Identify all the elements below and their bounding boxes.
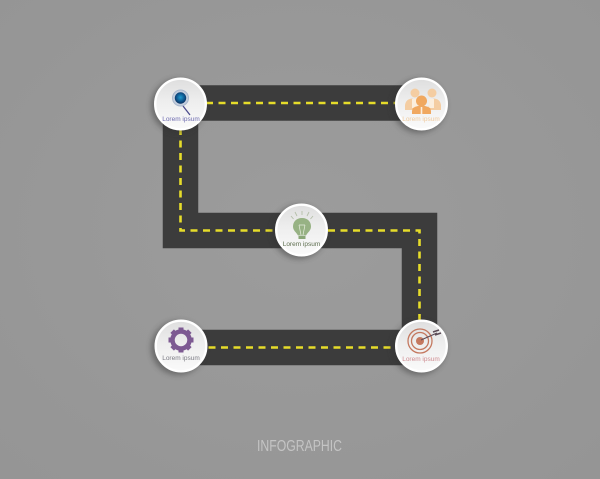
icon: target with arrow: [408, 329, 441, 353]
label: lorem ipsum: Lorem ipsum: [402, 356, 440, 363]
road: [180, 103, 421, 348]
title: INFOGRAPHIC: [257, 438, 342, 455]
node: target: [392, 321, 447, 375]
label: lorem ipsum: Lorem ipsum: [283, 241, 320, 248]
node: idea: [272, 205, 327, 259]
label: lorem ipsum: Lorem ipsum: [402, 116, 440, 123]
node: settings: [151, 321, 206, 375]
road centre dashes: [180, 103, 421, 348]
icon: light bulb: [291, 211, 313, 239]
node: team: [392, 79, 447, 133]
icon: gear: [168, 328, 194, 352]
label: lorem ipsum: Lorem ipsum: [162, 355, 200, 362]
icon: people: [405, 88, 441, 114]
node: search: [151, 79, 206, 133]
icon: magnifying glass: [172, 90, 190, 115]
label: lorem ipsum: Lorem ipsum: [162, 116, 200, 123]
